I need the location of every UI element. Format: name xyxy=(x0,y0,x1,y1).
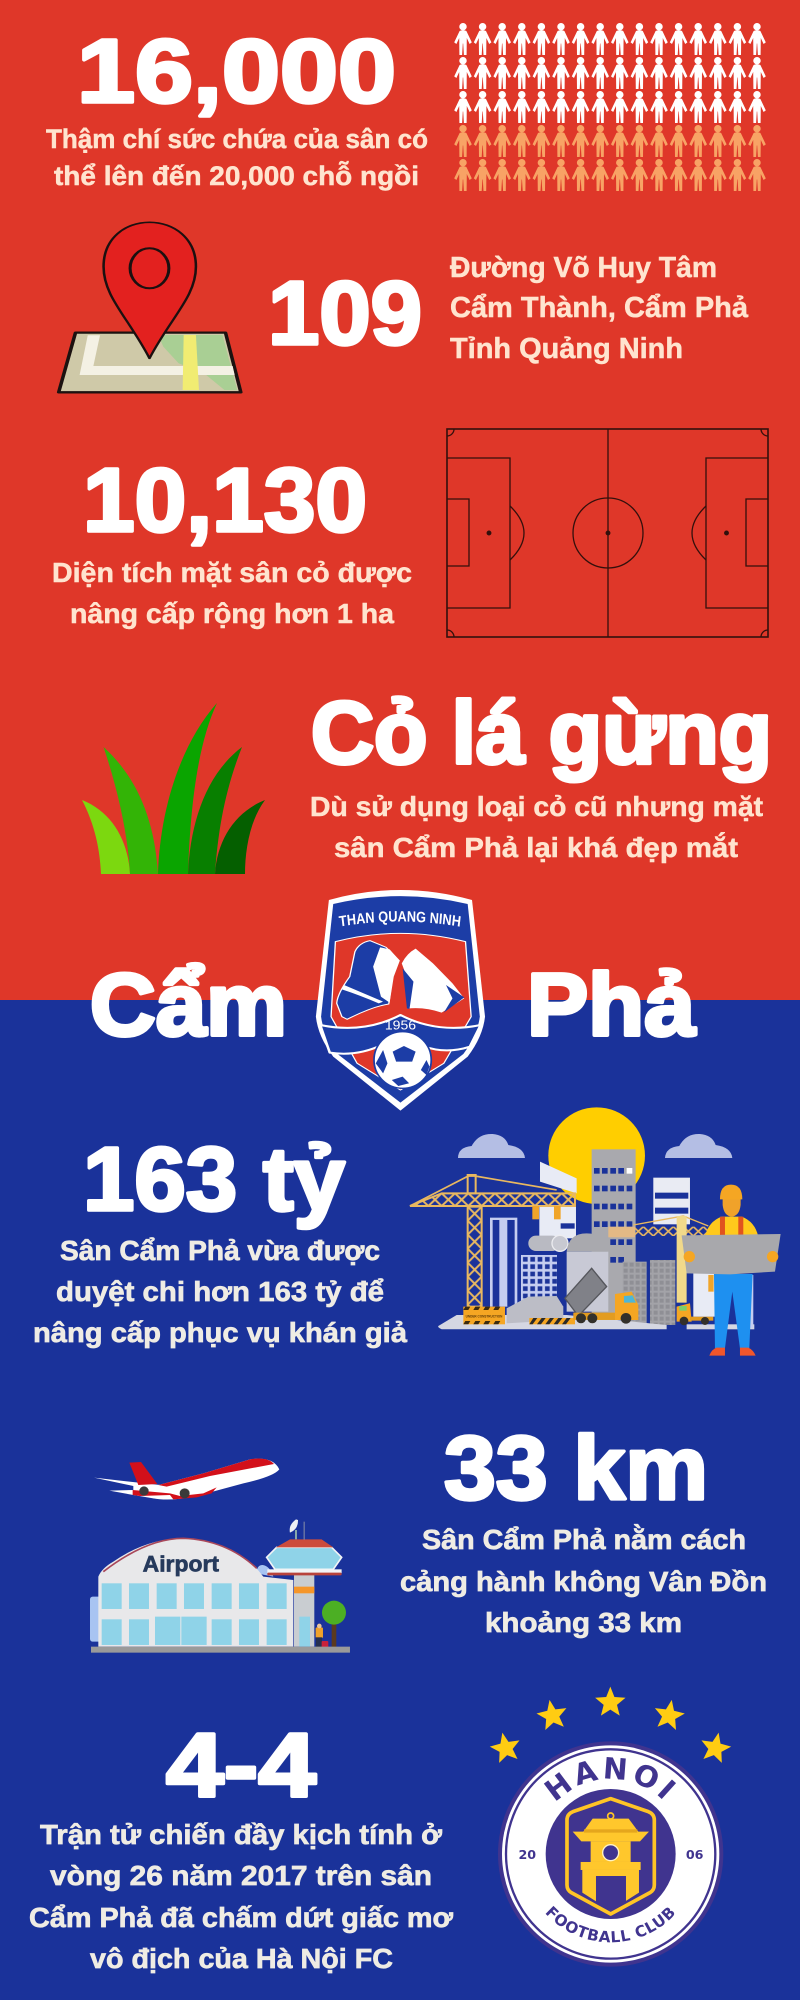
rocks xyxy=(507,1296,563,1323)
pipes xyxy=(528,1235,568,1251)
barricade xyxy=(463,1307,505,1324)
light buildings xyxy=(490,1207,576,1307)
match description: Cẩm Phả đã chấm dứt giấc mơ xyxy=(29,1902,453,1933)
panel: memorable match xyxy=(29,1686,732,1974)
distance description: cảng hành không Vân Đồn xyxy=(400,1566,767,1597)
budget description xyxy=(33,1235,407,1348)
worker xyxy=(682,1185,781,1356)
panel: grass type xyxy=(82,683,772,874)
crest lettering: 20 xyxy=(519,1847,536,1862)
icon: grass tuft xyxy=(82,703,265,874)
upper right building xyxy=(653,1178,690,1224)
match description: vòng 26 năm 2017 trên sân xyxy=(50,1860,432,1891)
light buildings behind worker xyxy=(693,1273,753,1328)
panel: airport distance xyxy=(90,1419,767,1653)
plane xyxy=(94,1458,279,1500)
illustration: plane and airport xyxy=(90,1458,350,1653)
crest shield and gate xyxy=(567,1799,654,1914)
icon: crowd of people xyxy=(454,23,766,191)
capacity description xyxy=(46,124,428,191)
terminal xyxy=(90,1538,293,1647)
crest lettering: FOOTBALL CLUB xyxy=(546,1906,674,1942)
capacity number: 16,000 xyxy=(77,22,396,122)
left crane xyxy=(410,1175,575,1307)
match description xyxy=(29,1819,453,1974)
football pitch diagram xyxy=(447,429,768,637)
budget number: 163 tỷ xyxy=(83,1130,345,1230)
distance description: Sân Cẩm Phả nằm cách xyxy=(422,1524,746,1555)
grass heading: Cỏ lá gừng xyxy=(311,683,772,782)
white banner panel xyxy=(540,1162,577,1193)
barricade: UNDER CONSTRUCTION xyxy=(466,1313,502,1318)
panel: upgrade budget xyxy=(33,1107,781,1356)
illustration: construction site xyxy=(410,1107,781,1356)
logo: Hanoi FC crest xyxy=(490,1686,732,1967)
pitch area description: nâng cấp rộng hơn 1 ha xyxy=(70,598,394,629)
dump truck xyxy=(565,1268,638,1324)
capacity description: thể lên đến 20,000 chỗ ngồi xyxy=(54,160,419,191)
background: blue panel xyxy=(0,1000,800,2000)
capacity description: Thậm chí sức chứa của sân có xyxy=(46,124,428,154)
ground xyxy=(438,1315,754,1329)
small truck xyxy=(677,1303,713,1325)
main title: Cẩm xyxy=(90,955,287,1054)
stars xyxy=(487,1687,734,1764)
striped ramp xyxy=(529,1318,575,1324)
crest disc xyxy=(498,1741,723,1967)
crest lettering xyxy=(519,1757,704,1942)
distance description xyxy=(400,1524,767,1638)
sun xyxy=(548,1107,645,1204)
tall tower xyxy=(592,1149,636,1316)
panel: capacity xyxy=(46,22,766,191)
address text xyxy=(450,252,749,365)
logo: Than Quang Ninh crest: THAN QUANG NINH xyxy=(338,911,461,927)
budget description: Sân Cẩm Phả vừa được xyxy=(60,1235,380,1266)
logo: Than Quang Ninh crest: 1956 xyxy=(385,1019,416,1033)
crest lettering: 06 xyxy=(686,1847,704,1862)
match score: 4-4 xyxy=(166,1716,316,1816)
pitch area description xyxy=(52,557,412,629)
right crane xyxy=(608,1216,708,1303)
budget description: nâng cấp phục vụ khán giả xyxy=(33,1317,407,1348)
pitch area description: Diện tích mặt sân cỏ được xyxy=(52,557,412,588)
ground xyxy=(91,1647,350,1653)
panel: address xyxy=(59,222,749,392)
grass description xyxy=(310,791,763,863)
control tower xyxy=(267,1519,342,1647)
grass description: Dù sử dụng loại cỏ cũ nhưng mặt xyxy=(310,791,763,822)
clouds xyxy=(458,1134,732,1158)
pitch area number: 10,130 xyxy=(83,451,367,551)
address text: Đường Võ Huy Tâm xyxy=(450,252,717,284)
main title xyxy=(90,955,696,1054)
traveller xyxy=(316,1624,328,1651)
crest lettering: HANOI xyxy=(544,1757,676,1801)
background: red panel xyxy=(0,0,800,1000)
silo building xyxy=(567,1233,608,1312)
distance number: 33 km xyxy=(444,1419,708,1519)
budget description: duyệt chi hơn 163 tỷ để xyxy=(56,1276,384,1307)
icon: map with location pin xyxy=(59,222,241,392)
distance description: khoảng 33 km xyxy=(485,1607,682,1638)
gray low buildings xyxy=(623,1260,675,1325)
main title: Phả xyxy=(527,955,696,1054)
address text: Tỉnh Quảng Ninh xyxy=(450,333,683,365)
address text: Cẩm Thành, Cẩm Phả xyxy=(450,292,749,324)
match description: vô địch của Hà Nội FC xyxy=(90,1943,393,1974)
address number: 109 xyxy=(268,264,422,364)
tree xyxy=(322,1601,346,1647)
match description: Trận tử chiến đầy kịch tính ở xyxy=(40,1819,442,1850)
panel: pitch area xyxy=(52,429,768,637)
airport sign: Airport xyxy=(143,1552,220,1577)
grass description: sân Cẩm Phả lại khá đẹp mắt xyxy=(334,832,738,863)
logo: Than Quang Ninh crest xyxy=(316,890,486,1111)
